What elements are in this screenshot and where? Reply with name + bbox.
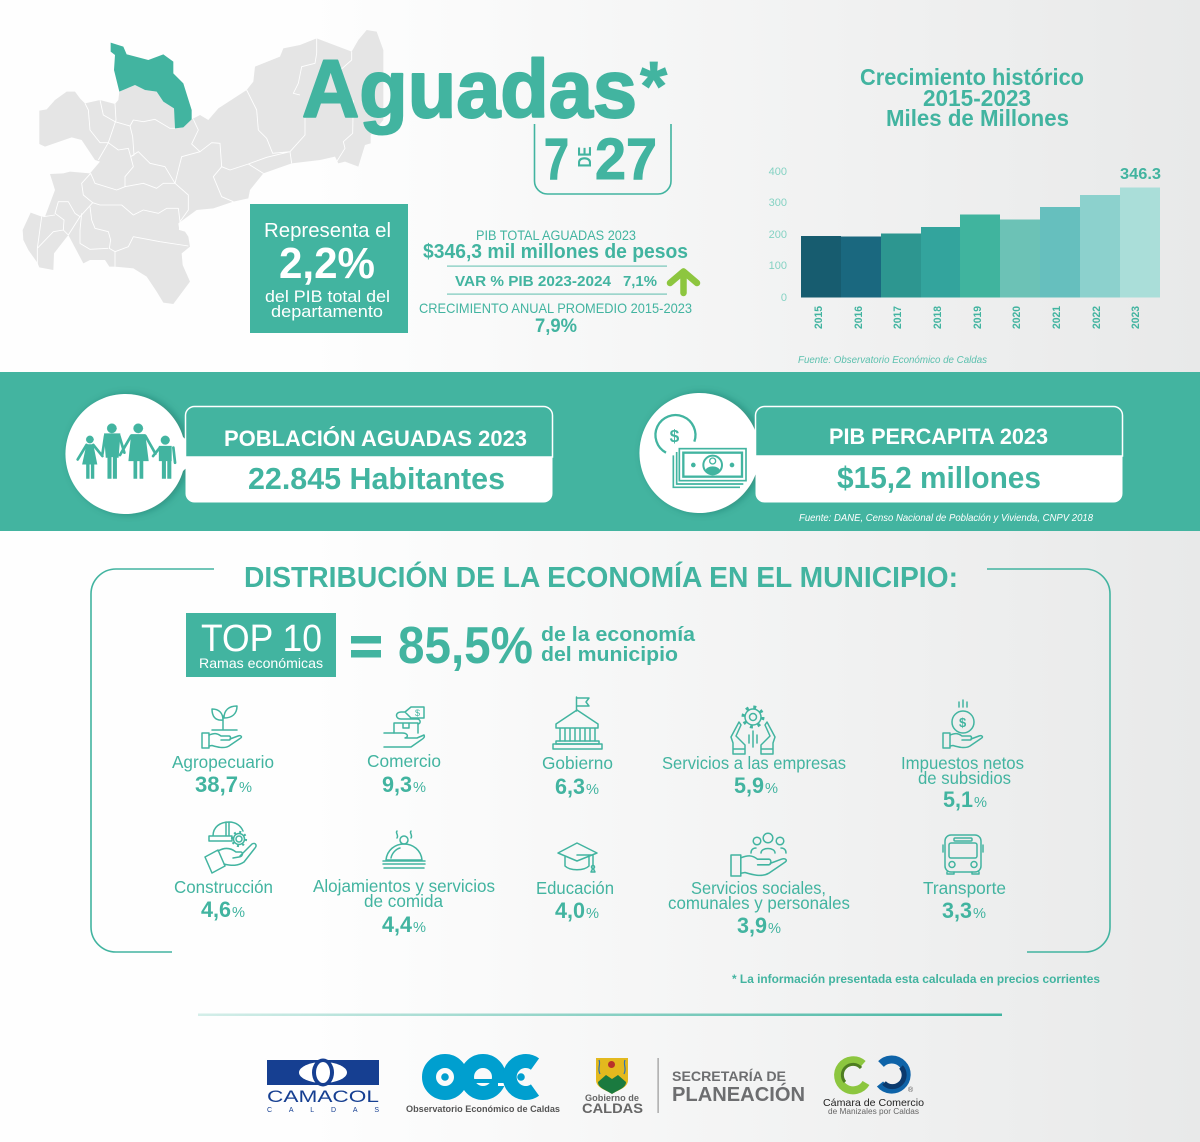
sector: servicios a las empresas	[662, 707, 846, 798]
bar chart: 2018	[932, 306, 944, 329]
callout: share of department GDP	[250, 204, 408, 333]
icon: gear and hands	[731, 707, 775, 754]
logo: Cámara de Comercio de Manizales por Caldas: ®	[908, 1086, 914, 1094]
bar chart: 0	[781, 292, 787, 304]
bar chart: 2016	[853, 306, 865, 329]
icon: money: $	[670, 426, 680, 446]
sector: comercio	[367, 707, 441, 797]
sector: servicios sociales	[668, 833, 850, 938]
sector: impuestos netos de subsidios	[901, 700, 1024, 812]
logo: Secretaría de Planeación: PLANEACIÓN	[672, 1082, 805, 1106]
top 10 badge	[186, 613, 336, 677]
sector: educación: %	[586, 905, 599, 922]
sector: construcción	[174, 822, 273, 922]
sector: construcción: %	[232, 904, 245, 921]
sector: servicios sociales: 3,9	[737, 913, 767, 938]
title: Aguadas	[302, 44, 637, 135]
ranking 7 de 27: 7	[544, 127, 569, 192]
logo: Observatorio Económico de Caldas	[406, 1061, 560, 1115]
GDP statistics: CRECIMIENTO ANUAL PROMEDIO 2015-2023	[419, 300, 692, 316]
sector: impuestos netos de subsidios: %	[974, 794, 987, 811]
sector: construcción: 4,6	[201, 897, 231, 922]
logo: Camacol Caldas: C A L D A S	[267, 1107, 379, 1114]
GDP statistics: PIB TOTAL AGUADAS 2023	[476, 228, 636, 243]
sector: gobierno: %	[586, 781, 599, 798]
sector: alojamientos y servicios de comida: de comida	[364, 891, 443, 911]
top 10 badge: Ramas económicas	[199, 655, 323, 671]
sector: alojamientos y servicios de comida	[313, 831, 495, 937]
logo: Camacol Caldas	[267, 1058, 379, 1114]
chart source: Fuente: Observatorio Económico de Caldas	[798, 355, 987, 366]
bar chart: 2019	[972, 306, 984, 329]
population card: POBLACIÓN AGUADAS 2023	[224, 426, 527, 451]
logo: Cámara de Comercio de Manizales por Caldas: Cámara de Comercio	[823, 1097, 924, 1109]
bar chart: 2023	[1130, 306, 1142, 329]
GDP statistics: 7,1%	[623, 273, 657, 290]
sector: gobierno	[542, 697, 613, 799]
chart heading	[860, 64, 1084, 131]
icon: people over hand	[731, 833, 786, 876]
band source: Fuente: DANE, Censo Nacional de Población y Vivienda, CNPV 2018	[799, 513, 1093, 524]
logo: Cámara de Comercio de Manizales por Caldas: de Manizales por Caldas	[828, 1107, 919, 1116]
sector: transporte	[923, 835, 1006, 923]
icon: family	[78, 424, 175, 479]
logo: Gobierno de Caldas: CALDAS	[582, 1100, 643, 1116]
sector: gobierno: 6,3	[555, 774, 585, 799]
icon: green up arrow	[670, 272, 697, 293]
top 10 share: de la economía	[541, 624, 696, 646]
sector: servicios sociales: Servicios sociales,	[691, 878, 826, 898]
map of Caldas department	[23, 30, 383, 304]
panel: population and GDP per capita band	[0, 372, 1200, 531]
icon: graduation cap	[558, 843, 597, 872]
bar chart: 2015	[813, 306, 825, 329]
bar chart: 2020	[1011, 306, 1023, 329]
sector: agropecuario	[172, 706, 274, 797]
callout: share of department GDP: Representa el	[264, 220, 391, 242]
sector: comercio: 9,3	[382, 772, 412, 797]
icon: helmet, gear and hand	[205, 822, 256, 873]
bar chart: 2022	[1091, 306, 1103, 329]
bar chart	[769, 166, 1161, 329]
GDP statistics	[419, 228, 692, 337]
sector: educación: Educación	[536, 878, 614, 898]
bar chart: 346.3	[1120, 166, 1161, 183]
sector: servicios a las empresas: %	[765, 780, 778, 797]
GDP statistics: VAR % PIB 2023-2024	[455, 273, 612, 290]
footnote: * La información presentada esta calculada en precios corrientes	[732, 972, 1100, 986]
sector: agropecuario: Agropecuario	[172, 752, 274, 772]
sector: transporte: 3,3	[942, 898, 972, 923]
GDP per capita card: PIB PERCAPITA 2023	[829, 424, 1048, 449]
icon: coin over hand: $	[959, 715, 967, 730]
icon: bus	[943, 835, 983, 874]
chart heading: Crecimiento histórico	[860, 64, 1084, 90]
chart heading: Miles de Millones	[886, 105, 1069, 131]
sector: educación: 4,0	[555, 898, 585, 923]
callout: share of department GDP: del PIB total del	[265, 287, 390, 306]
sector: comercio: Comercio	[367, 751, 441, 771]
population card: 22.845 Habitantes	[248, 461, 505, 496]
icon: sprout in hand	[202, 706, 241, 748]
ranking 7 de 27	[534, 124, 671, 194]
GDP statistics: 7,9%	[535, 316, 577, 337]
logo: Gobierno de Caldas	[582, 1058, 643, 1116]
population bubble	[65, 394, 201, 514]
bar chart: 300	[769, 197, 787, 209]
GDP per capita card	[756, 406, 1122, 502]
top 10 badge: TOP 10	[201, 618, 322, 660]
bar chart: 400	[769, 166, 787, 178]
sector: comercio: %	[413, 779, 426, 796]
sector: agropecuario: 38,7	[195, 772, 238, 797]
bar chart: 2021	[1051, 306, 1063, 329]
sector: alojamientos y servicios de comida: Alojamientos y servicios	[313, 876, 495, 896]
sector: servicios sociales: %	[768, 920, 781, 937]
sector: servicios sociales: comunales y personales	[668, 893, 850, 913]
sector: servicios a las empresas: 5,9	[734, 773, 764, 798]
logo: Camacol Caldas: CAMACOL	[267, 1087, 379, 1106]
sector: impuestos netos de subsidios: 5,1	[943, 787, 973, 812]
chart heading: 2015-2023	[923, 85, 1031, 111]
sector: construcción: Construcción	[174, 877, 273, 897]
top 10 share: del municipio	[541, 644, 678, 666]
sector: transporte: %	[973, 905, 986, 922]
GDP per capita bubble	[639, 393, 775, 513]
icon: package and tag in hand: $	[415, 708, 420, 718]
sector: gobierno: Gobierno	[542, 753, 613, 773]
sector: servicios a las empresas: Servicios a las empresas	[662, 753, 846, 773]
top 10 share	[398, 617, 696, 675]
bar chart: 100	[769, 260, 787, 272]
logo: Cámara de Comercio de Manizales por Caldas	[823, 1060, 924, 1116]
icon: money	[655, 415, 746, 487]
GDP per capita card: $15,2 millones	[837, 460, 1041, 495]
sector: alojamientos y servicios de comida: %	[413, 919, 426, 936]
sector: educación	[536, 843, 614, 923]
icon: government building	[553, 697, 602, 749]
callout: share of department GDP: departamento	[271, 302, 383, 321]
GDP statistics: $346,3 mil millones de pesos	[423, 241, 688, 263]
ranking 7 de 27: DE	[575, 146, 595, 168]
logo: Gobierno de Caldas: Gobierno de	[585, 1093, 639, 1103]
logo: Secretaría de Planeación	[672, 1069, 805, 1106]
top 10 share: 85,5%	[398, 617, 533, 675]
sector: transporte: Transporte	[923, 878, 1006, 898]
title: *	[640, 47, 668, 125]
icon: food cloche	[383, 831, 425, 868]
ranking 7 de 27: 27	[595, 127, 657, 192]
sector: agropecuario: %	[239, 779, 252, 796]
sector: alojamientos y servicios de comida: 4,4	[382, 912, 413, 937]
population card	[186, 406, 552, 502]
panel: economy distribution	[91, 560, 1110, 952]
callout: share of department GDP: 2,2%	[279, 239, 375, 288]
bar chart: 200	[769, 229, 787, 241]
logo: Secretaría de Planeación: SECRETARÍA DE	[672, 1069, 786, 1084]
sector: impuestos netos de subsidios: Impuestos netos	[901, 753, 1024, 773]
equals sign	[351, 636, 381, 658]
logo: Observatorio Económico de Caldas: Observatorio Económico de Caldas	[406, 1104, 560, 1115]
section heading: DISTRIBUCIÓN DE LA ECONOMÍA EN EL MUNICIPIO:	[244, 560, 958, 594]
bar chart: 2017	[892, 306, 904, 329]
sector: impuestos netos de subsidios: de subsidios	[918, 768, 1011, 788]
